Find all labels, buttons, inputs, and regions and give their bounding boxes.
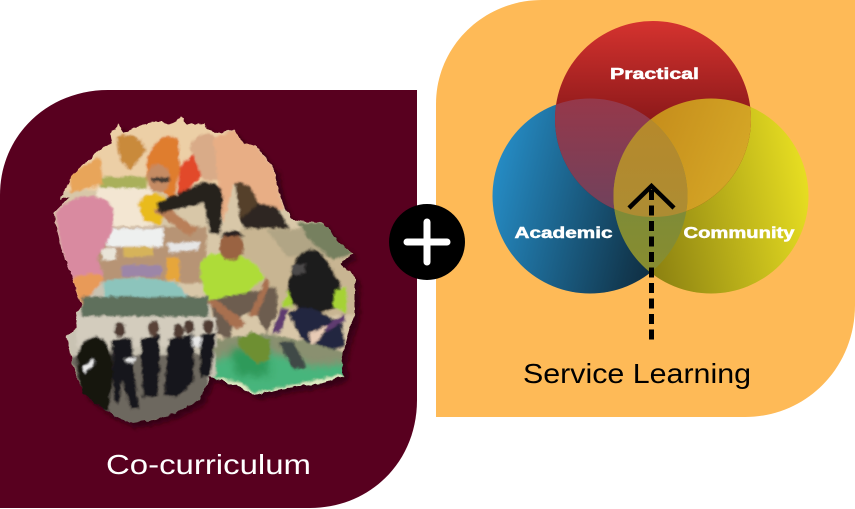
label: community: Community — [684, 225, 795, 242]
circle: community — [614, 98, 808, 294]
label: co-curriculum: Co-curriculum — [106, 449, 311, 480]
venn diagram — [492, 21, 808, 294]
group photo background — [66, 276, 218, 385]
circle: academic — [492, 98, 688, 294]
arrow: dashed upward — [629, 186, 674, 345]
collage shadow — [58, 121, 360, 428]
overlap: centre — [614, 120, 688, 217]
label: practical: Practical — [610, 66, 699, 83]
label: academic: Academic — [514, 225, 613, 242]
overlap: practical and community — [614, 98, 751, 211]
icon: plus — [389, 204, 465, 280]
pink hijab — [54, 194, 115, 280]
man in green shirt — [200, 253, 265, 300]
overlap: practical and academic — [555, 98, 650, 209]
students in black — [77, 337, 113, 412]
plot ground — [240, 228, 357, 315]
man in yellow — [138, 194, 168, 225]
lower ground fade — [212, 331, 344, 372]
table — [97, 227, 207, 283]
dark sleeve — [157, 182, 223, 233]
overlap: academic and community — [614, 120, 688, 272]
panel: co-curriculum — [0, 90, 417, 508]
photo collage — [53, 116, 362, 430]
label: service learning: Service Learning — [523, 358, 751, 389]
circle: practical — [555, 21, 751, 217]
collage photos — [53, 116, 356, 423]
panel: service learning — [436, 0, 855, 417]
orange figures — [147, 136, 180, 200]
woman in black hijab — [287, 249, 342, 317]
